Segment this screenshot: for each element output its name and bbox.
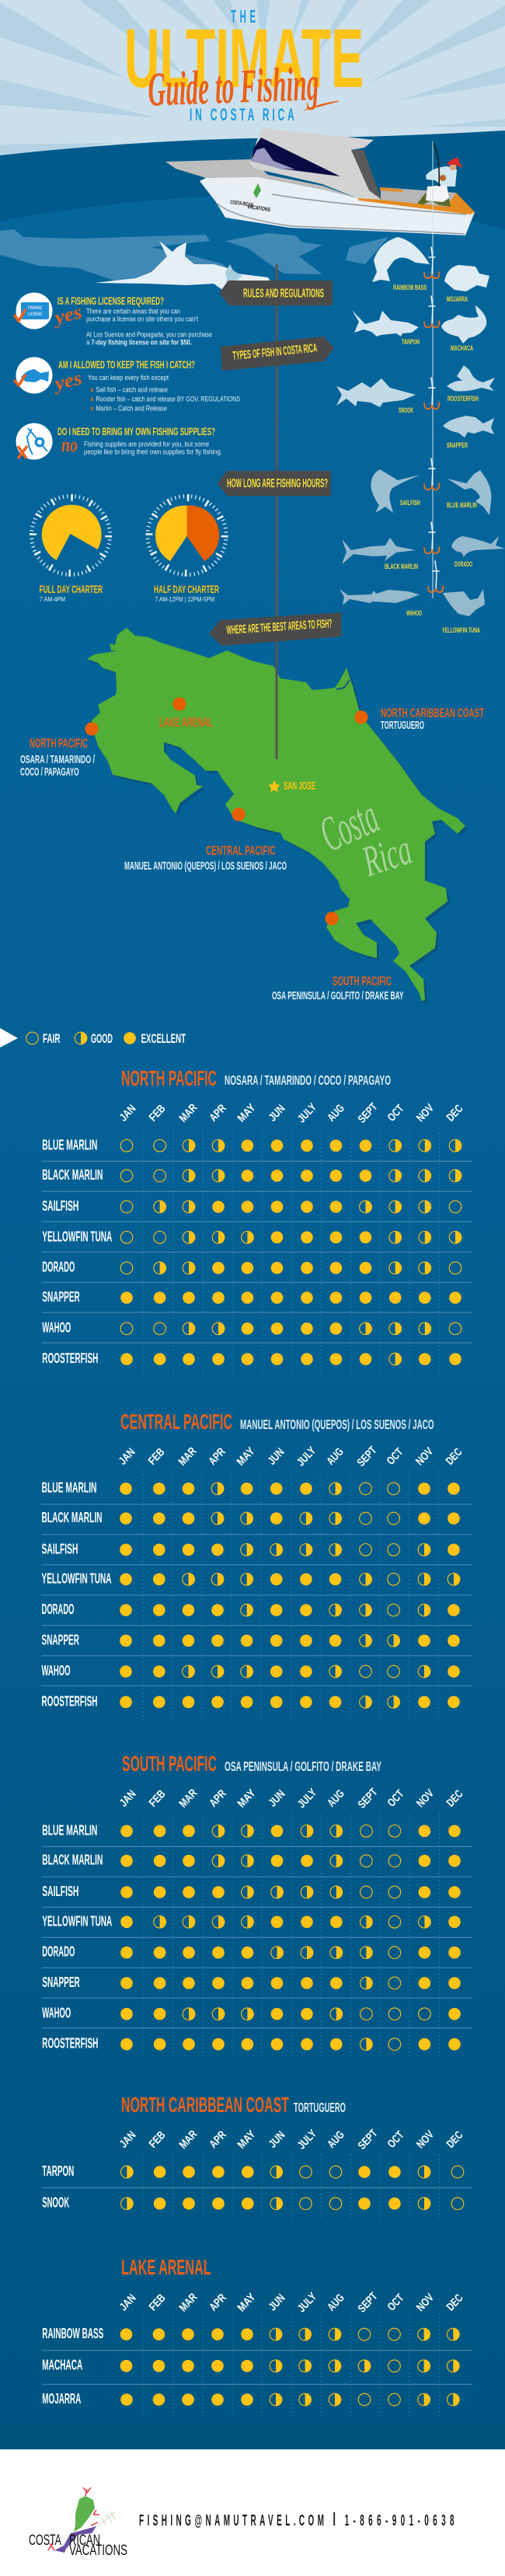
month headers: JAN	[117, 1103, 138, 1124]
row: blue marlin: BLUE MARLIN	[42, 1480, 96, 1496]
month headers	[117, 1101, 466, 1126]
month headers: JAN	[117, 1788, 138, 1810]
fish: wahoo: WAHOO	[406, 609, 422, 618]
Q1 fishing license: yes	[50, 302, 84, 329]
row: blue marlin: BLUE MARLIN	[42, 1136, 97, 1152]
month headers: JAN	[117, 1446, 138, 1468]
month headers: MAR	[176, 1445, 200, 1469]
map pin and label: Central Pacific: MANUEL ANTONIO (QUEPOS) / LOS SUENOS / JACO	[124, 860, 287, 873]
row: yellowfin tuna: YELLOWFIN TUNA	[42, 1570, 112, 1586]
Q2 keep the fish	[14, 357, 240, 413]
fish: sailfish: SAILFISH	[400, 499, 420, 507]
row: yellowfin tuna: YELLOWFIN TUNA	[42, 1228, 112, 1244]
contact line: FISHING@NAMUTRAVEL.COM	[139, 2513, 324, 2529]
heading	[121, 1066, 391, 1090]
month headers: APR	[207, 1445, 228, 1468]
map pin and label: North Caribbean Coast: TORTUGUERO	[381, 720, 424, 732]
logo: Costa Rican Vacations frog: RICAN	[69, 2532, 100, 2549]
map pin and label: South Pacific	[272, 912, 404, 1002]
month headers: SEPT	[355, 1445, 380, 1469]
sign: best areas	[209, 612, 342, 646]
sign: fishing hours: HOW LONG ARE FISHING HOURS?	[227, 477, 328, 490]
contact line	[139, 2512, 454, 2529]
month headers: APR	[207, 1102, 229, 1124]
row: yellowfin tuna: YELLOWFIN TUNA	[42, 1912, 112, 1929]
clock: full day charter	[31, 496, 110, 603]
row: dorado	[42, 1259, 461, 1275]
row: machaca	[42, 2357, 460, 2373]
row: wahoo: WAHOO	[42, 1662, 70, 1678]
row: wahoo	[42, 1319, 461, 1336]
month headers: DEC	[444, 2292, 466, 2313]
text: WHERE ARE THE BEST AREAS TO FISH?	[226, 617, 333, 637]
map pin and label: North Caribbean Coast	[354, 706, 484, 732]
fish: blue marlin	[447, 470, 491, 515]
month headers: APR	[207, 1787, 229, 1810]
title: Guide to Fishing	[147, 58, 319, 117]
heading: TORTUGUERO	[294, 2100, 346, 2115]
water splash patches	[0, 229, 388, 281]
row: snook	[42, 2194, 464, 2211]
table: Lake Arenal	[42, 2255, 472, 2417]
month headers: OCT	[385, 2292, 406, 2313]
Q1 fishing license: There are certain areas that you can	[86, 308, 180, 315]
row: yellowfin tuna	[42, 1228, 461, 1244]
row: black marlin	[42, 1509, 460, 1525]
row: yellowfin tuna	[42, 1570, 460, 1586]
table: North Pacific	[42, 1066, 472, 1374]
fish: snapper: SNAPPER	[447, 441, 468, 450]
header: sky with sun rays	[0, 0, 505, 159]
fish: sailfish	[371, 469, 420, 513]
cockpit	[381, 187, 466, 210]
Q1 fishing license: a 7-day fishing license on site for $50.	[86, 339, 192, 347]
month headers: MAR	[177, 2128, 200, 2152]
row: rainbow bass	[42, 2325, 460, 2341]
boat: COSTA RICAN	[230, 200, 253, 208]
month headers: AUG	[326, 1787, 347, 1810]
fish: mojarra	[444, 265, 489, 304]
legend	[0, 1028, 186, 1047]
month headers: JAN	[117, 2292, 138, 2313]
Q3 fishing supplies: DO I NEED TO BRING MY OWN FISHING SUPPLIES?	[57, 426, 215, 437]
map of Costa Rica	[87, 628, 468, 1003]
table: Central Pacific	[41, 1410, 472, 1717]
logo: Costa Rican Vacations frog: COSTA	[29, 2532, 61, 2549]
month headers: AUG	[326, 1102, 347, 1124]
row: yellowfin tuna	[42, 1912, 461, 1929]
jumping fish splash	[95, 241, 270, 290]
month headers: AUG	[326, 2292, 347, 2314]
row: mojarra	[42, 2390, 460, 2407]
month headers: JUN	[266, 1446, 287, 1468]
month headers: DEC	[444, 1446, 465, 1468]
month headers: APR	[207, 2128, 229, 2151]
row: sailfish	[42, 1197, 461, 1214]
table: North Caribbean Coast	[42, 2093, 472, 2219]
row: snapper	[42, 1631, 460, 1647]
window	[251, 138, 340, 176]
row: wahoo: WAHOO	[42, 2005, 71, 2021]
row: blue marlin	[42, 1821, 461, 1838]
heading	[122, 1752, 381, 1776]
boat: VACATIONS	[247, 204, 271, 213]
icon: rod and reel	[16, 423, 53, 460]
month headers: NOV	[414, 2292, 437, 2314]
month headers: MAY	[235, 2291, 259, 2314]
fish: snook	[336, 378, 416, 415]
month headers: MAR	[177, 1101, 200, 1125]
month headers: SEPT	[356, 1101, 381, 1126]
Q2 keep the fish: x	[90, 386, 94, 393]
month headers: AUG	[326, 2128, 347, 2151]
title	[124, 7, 364, 124]
map pin and label: North Pacific	[20, 722, 99, 779]
Q1 fishing license: At Los Suenos and Popagada, you can purchase	[86, 331, 212, 339]
month headers: JULY	[295, 1786, 319, 1811]
row: black marlin: BLACK MARLIN	[42, 1509, 103, 1525]
map pin and label: South Pacific: SOUTH PACIFIC	[333, 974, 392, 988]
month headers: JUN	[266, 2129, 287, 2151]
fish: black marlin	[342, 538, 418, 571]
sea band dark	[0, 131, 505, 230]
sign: fishing hours	[218, 471, 331, 496]
Q2 keep the fish: Marlin – Catch and Release	[96, 404, 167, 413]
fish: blue marlin: BLUE MARLIN	[447, 501, 477, 510]
row: mojarra: MOJARRA	[42, 2390, 81, 2407]
icon: fish	[14, 357, 53, 393]
row: roosterfish: ROOSTERFISH	[42, 1350, 98, 1366]
Q2 keep the fish: x	[90, 396, 94, 403]
heading: LAKE ARENAL	[121, 2255, 211, 2279]
row: dorado: DORADO	[42, 1601, 75, 1617]
row: tarpon: TARPON	[42, 2163, 74, 2179]
Q1 fishing license: purchase a license on site others you can't	[86, 315, 198, 323]
Q2 keep the fish: You can keep every fish except	[88, 374, 169, 382]
fish: dorado	[451, 536, 505, 569]
month headers: APR	[207, 2292, 229, 2314]
row: snapper	[42, 1288, 461, 1305]
row: blue marlin: BLUE MARLIN	[42, 1821, 97, 1838]
month headers: JUN	[266, 1788, 287, 1810]
clock: full day charter: FULL DAY CHARTER	[40, 584, 103, 595]
row: black marlin	[42, 1852, 461, 1868]
month headers: MAY	[235, 1787, 259, 1811]
logo: Costa Rican Vacations frog	[29, 2487, 127, 2559]
map pin and label: South Pacific: OSA PENINSULA / GOLFITO / DRAKE BAY	[272, 990, 404, 1002]
hooks	[424, 247, 443, 592]
clock: half day charter	[148, 496, 226, 603]
row: wahoo	[42, 2005, 461, 2021]
row: dorado	[42, 1943, 461, 1960]
month headers: FEB	[147, 1103, 168, 1124]
month headers: OCT	[385, 1788, 406, 1810]
month headers: OCT	[385, 2129, 406, 2151]
fish: snapper	[443, 416, 494, 450]
month headers: SEPT	[356, 2128, 381, 2152]
month headers: JULY	[294, 1445, 319, 1469]
row: sailfish	[42, 1540, 460, 1556]
month headers: MAR	[177, 1786, 200, 1811]
row: sailfish: SAILFISH	[42, 1197, 78, 1214]
map pin and label: Lake Arenal: LAKE ARENAL	[159, 715, 213, 730]
fish: tarpon: TARPON	[402, 338, 420, 347]
title: IN COSTA RICA	[190, 105, 294, 124]
Q2 keep the fish: Rooster fish – catch and release BY GOV. REGULATIONS	[96, 395, 240, 404]
row: sailfish	[42, 1883, 461, 1899]
month headers: JUN	[266, 2292, 287, 2313]
fish: machaca	[441, 305, 486, 353]
month headers	[117, 1445, 465, 1469]
month headers: FEB	[147, 2129, 168, 2151]
month headers: JULY	[295, 2128, 319, 2152]
row: roosterfish	[42, 1692, 460, 1709]
map pin and label: Lake Arenal	[159, 697, 213, 730]
fish: wahoo	[340, 589, 422, 618]
legend: EXCELLENT	[141, 1031, 186, 1046]
row: sailfish: SAILFISH	[42, 1540, 78, 1556]
month headers: JUN	[266, 1103, 287, 1124]
fish: snook: SNOOK	[399, 406, 413, 415]
map pin and label: North Pacific: OSARA / TAMARINDO /	[20, 754, 95, 766]
heading: SOUTH PACIFIC	[122, 1752, 217, 1776]
month headers: FEB	[147, 1788, 168, 1810]
fish: rainbow bass: RAINBOW BASS	[393, 284, 427, 292]
map pin and label: Central Pacific	[124, 807, 287, 873]
month headers: NOV	[414, 1102, 437, 1124]
row: black marlin: BLACK MARLIN	[42, 1166, 103, 1183]
footer	[0, 2449, 505, 2576]
month headers: DEC	[444, 1103, 466, 1124]
fish: yellowfin tuna	[442, 589, 485, 635]
row: snapper	[42, 1974, 461, 1990]
fish: dorado: DORADO	[454, 560, 472, 569]
row: snapper: SNAPPER	[42, 1974, 80, 1990]
icon: license card: LICENSE	[28, 312, 42, 317]
month headers: MAY	[235, 1445, 258, 1469]
row: dorado	[42, 1601, 460, 1617]
month headers: MAR	[177, 2291, 200, 2314]
row: rainbow bass: RAINBOW BASS	[42, 2325, 103, 2341]
month headers: JAN	[117, 2129, 138, 2151]
month headers: OCT	[385, 1103, 406, 1124]
row: sailfish: SAILFISH	[42, 1883, 78, 1899]
month headers: NOV	[414, 1787, 437, 1810]
bow deck	[165, 159, 357, 198]
fish: tarpon	[352, 310, 420, 347]
row: blue marlin	[42, 1136, 461, 1152]
month headers: AUG	[325, 1445, 347, 1468]
row: machaca: MACHACA	[42, 2357, 82, 2373]
hull	[200, 176, 475, 235]
icon: license card	[14, 292, 53, 329]
Q2 keep the fish: Sail fish – catch and release	[96, 385, 168, 395]
month headers: OCT	[385, 1446, 406, 1468]
map script: Costa Rica	[312, 788, 417, 887]
month headers	[117, 2290, 466, 2315]
sign: types of fish: TYPES OF FISH IN COSTA RICA	[232, 342, 318, 363]
legend: FAIR	[43, 1031, 61, 1046]
sign: rules and regulations: RULES AND REGULATIONS	[243, 288, 324, 300]
fish: mojarra: MOJARRA	[447, 295, 468, 304]
month headers: SEPT	[356, 2290, 381, 2315]
Q3 fishing supplies	[16, 423, 222, 460]
sign: rules and regulations	[219, 281, 333, 305]
clock: half day charter: 7 AM-12PM | 12PM-5PM	[155, 595, 214, 603]
heading: NORTH CARIBBEAN COAST	[121, 2093, 289, 2117]
Q1 fishing license	[14, 292, 212, 347]
title: THE	[231, 7, 256, 26]
icon: license card: FISHING	[28, 305, 42, 311]
map script: Costa Rica: Rica	[356, 825, 417, 887]
clock: full day charter: 7 AM-4PM	[40, 595, 65, 603]
month headers: MAY	[235, 2128, 259, 2152]
map script: Costa Rica: Costa	[312, 788, 386, 862]
map pin and label: Central Pacific: CENTRAL PACIFIC	[206, 843, 275, 858]
row: tarpon	[42, 2163, 464, 2179]
heading: CENTRAL PACIFIC	[120, 1410, 232, 1434]
Q2 keep the fish: x	[90, 405, 94, 412]
row: snook: SNOOK	[42, 2194, 70, 2211]
row: roosterfish: ROOSTERFISH	[42, 2035, 98, 2051]
heading: NORTH PACIFIC	[121, 1066, 217, 1090]
fishing line	[432, 141, 434, 598]
fish: black marlin: BLACK MARLIN	[385, 563, 418, 571]
month headers: SEPT	[356, 1786, 381, 1811]
Q3 fishing supplies: Fishing supplies are provided for you, but some	[84, 440, 209, 449]
row: roosterfish: ROOSTERFISH	[42, 1692, 98, 1709]
month headers: DEC	[444, 1788, 466, 1810]
row: roosterfish	[42, 1350, 461, 1366]
map pin and label: North Pacific: COCO / PAPAGAYO	[20, 766, 79, 779]
row: snapper: SNAPPER	[42, 1631, 79, 1647]
boat logo	[253, 183, 261, 198]
month headers: MAY	[235, 1102, 259, 1125]
logo: Costa Rican Vacations frog: VACATIONS	[69, 2543, 127, 2559]
Q3 fishing supplies: people like to bring their own supplies for fly fishing.	[84, 448, 222, 457]
boat	[165, 128, 475, 235]
row: black marlin	[42, 1166, 461, 1183]
sign: types of fish	[221, 336, 334, 371]
row: roosterfish	[42, 2035, 461, 2051]
cabin	[249, 128, 381, 200]
heading: OSA PENINSULA / GOLFITO / DRAKE BAY	[225, 1759, 381, 1774]
Q2 keep the fish: yes	[50, 368, 84, 396]
Q3 fishing supplies: no	[61, 434, 78, 456]
fish: machaca: MACHACA	[451, 344, 473, 353]
month headers: NOV	[414, 2128, 437, 2151]
legend: GOOD	[91, 1031, 113, 1046]
month headers: DEC	[444, 2129, 466, 2151]
row: black marlin: BLACK MARLIN	[42, 1852, 103, 1868]
Q2 keep the fish: AM I ALLOWED TO KEEP THE FISH I CATCH?	[58, 359, 195, 371]
row: snapper: SNAPPER	[42, 1288, 80, 1305]
month headers: NOV	[413, 1445, 436, 1468]
row: dorado: DORADO	[42, 1259, 75, 1275]
contact line: 1-866-901-0638	[345, 2513, 454, 2529]
fisherman	[417, 193, 451, 207]
row: wahoo	[42, 1662, 460, 1678]
pole over map	[275, 653, 278, 759]
heading	[120, 1410, 434, 1434]
table: South Pacific	[42, 1752, 472, 2059]
month headers: FEB	[147, 2292, 168, 2313]
row: dorado: DORADO	[42, 1943, 75, 1960]
month headers: JULY	[295, 1101, 319, 1125]
map pin and label: North Pacific: NORTH PACIFIC	[30, 736, 88, 751]
fish: roosterfish	[447, 365, 495, 403]
cabin rear panel	[351, 150, 381, 200]
fish: rainbow bass	[372, 237, 430, 292]
row: blue marlin	[42, 1480, 460, 1496]
clock: half day charter: HALF DAY CHARTER	[154, 584, 219, 595]
month headers	[117, 1786, 466, 1811]
month headers: JULY	[295, 2290, 319, 2315]
map marker: San Jose: SAN JOSE	[284, 780, 315, 793]
fish: roosterfish: ROOSTERFISH	[448, 395, 479, 403]
signpost pole	[275, 264, 278, 759]
row: wahoo: WAHOO	[42, 1319, 71, 1336]
month headers	[117, 2128, 466, 2152]
map marker: San Jose	[268, 780, 315, 793]
month headers: FEB	[146, 1446, 167, 1468]
Q1 fishing license: IS A FISHING LICENSE REQUIRED?	[57, 295, 164, 307]
